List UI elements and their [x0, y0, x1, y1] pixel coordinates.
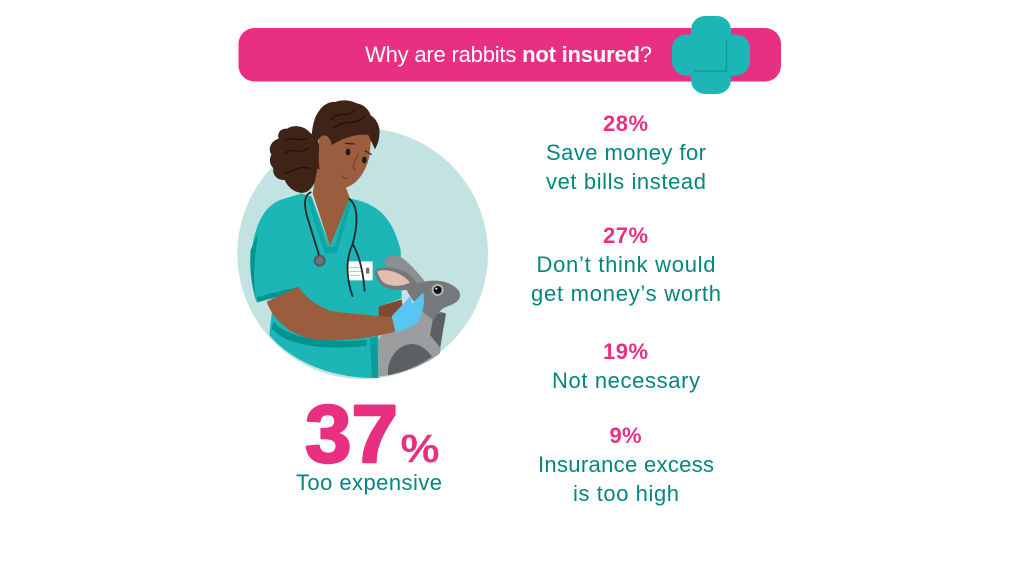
stat: 27%: 27%: [603, 223, 648, 248]
scrubs top: [251, 193, 402, 378]
rabbit: [375, 256, 460, 377]
face features: [342, 143, 372, 179]
stat: 28%: 28%: [603, 111, 648, 136]
far arm: [379, 299, 403, 320]
headline statistic: [296, 389, 442, 495]
rabbit head: [407, 281, 460, 320]
illustration: vet holding a rabbit: [237, 100, 488, 379]
stat: 9%: 9%: [610, 423, 642, 448]
stat: 9%: is too high: [573, 481, 679, 506]
stat: 28%: [546, 111, 706, 194]
hair bun: [270, 126, 322, 193]
stat: 27%: get money’s worth: [531, 281, 721, 306]
hair curl lines: [285, 110, 365, 173]
stat: 28%: Save money for: [546, 140, 706, 165]
hair top: [312, 100, 380, 149]
background circle: [237, 128, 488, 379]
caption: Too expensive: [296, 470, 442, 495]
stat: 27%: Don’t think would: [536, 252, 716, 277]
rabbit inner ear: [377, 270, 410, 286]
percent sign: %: [400, 427, 440, 471]
rabbit eye: [432, 284, 444, 296]
stethoscope: [305, 192, 365, 297]
number 37: 37: [305, 389, 398, 480]
ear: [319, 133, 332, 151]
neck: [313, 168, 350, 247]
banner title: Why are rabbits not insured?: [365, 42, 652, 67]
near arm: [267, 287, 395, 340]
icon: medical cross: [672, 16, 750, 94]
stat: 9%: [538, 423, 714, 506]
scrubs hem texture: [370, 337, 378, 378]
name badge: [347, 261, 373, 280]
rabbit body: [378, 303, 445, 377]
head: [319, 130, 372, 189]
stat: 9%: Insurance excess: [538, 452, 714, 477]
rabbit front ear: [375, 267, 420, 290]
scrubs v-neck: [307, 197, 352, 253]
stat: 27%: [531, 223, 721, 306]
stat: 28%: vet bills instead: [546, 169, 706, 194]
scrubs shading: [250, 233, 367, 348]
header banner: [238, 16, 781, 94]
blue glove: [392, 292, 424, 332]
stat: 19%: [552, 339, 700, 393]
stat: 19%: Not necessary: [552, 368, 700, 393]
rabbit back ear: [384, 256, 425, 288]
stat: 19%: 19%: [603, 339, 648, 364]
